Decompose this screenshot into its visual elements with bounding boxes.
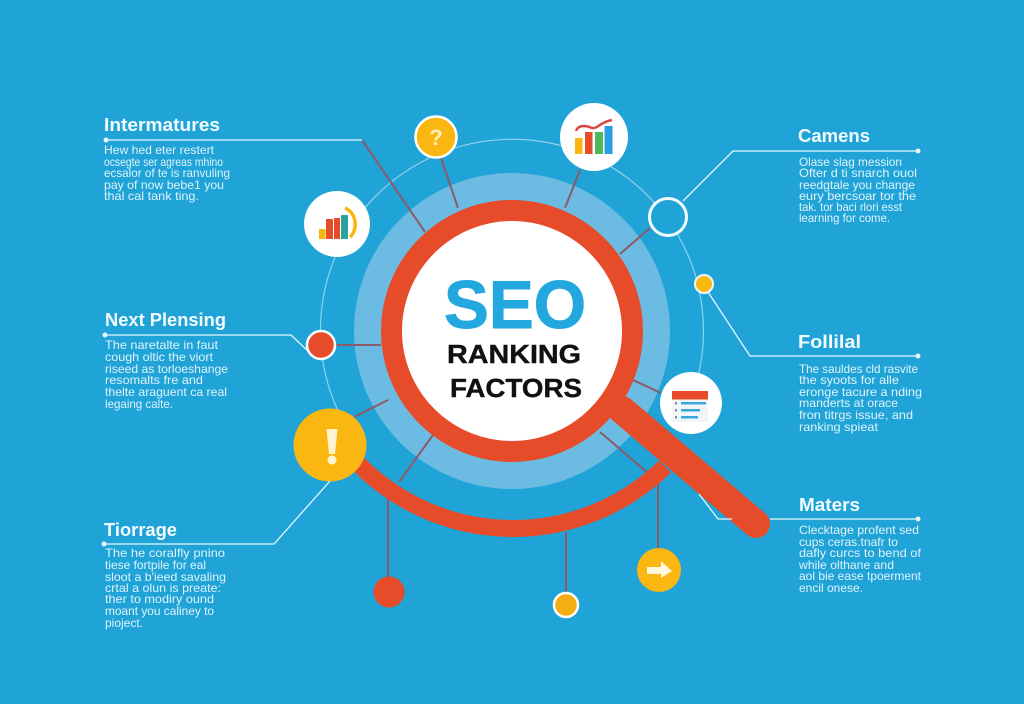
panel: Tiorrage: pioject. [105, 616, 143, 630]
icon: hollow circle [650, 198, 686, 236]
panel: Tiorrage: crtal a olun is preate: [105, 581, 221, 595]
panel: Follilal: eronge tacure a nding [799, 385, 922, 399]
panel: Maters: dafly curcs to bend of [799, 546, 922, 560]
icon: exclamation mark [294, 408, 366, 482]
icon: arrow [637, 548, 681, 592]
panel: Camens: reedgtale you change [799, 178, 915, 192]
panel: Maters: encil onese. [799, 581, 863, 595]
orbit ring [320, 139, 703, 410]
panel: Camens: Camens [798, 125, 870, 146]
panel: Maters: Maters [799, 494, 860, 515]
panel: Tiorrage: sloot a b'ieed savaling [105, 570, 226, 584]
panel: Camens: Olase slag mession [799, 155, 902, 169]
icon: bar chart with arc [304, 191, 370, 257]
icon: bar chart with trend line [560, 103, 628, 171]
panel: Intermatures: ocsegte ser agreas mhino [104, 155, 223, 169]
panel: Intermatures: ecsalor of te is ranvuling [104, 166, 230, 180]
panel: Camens: Ofter d ti snarch ouol [799, 166, 917, 180]
panel: Camens: tak. tor baci rlori esst [799, 200, 903, 214]
connector lines [335, 140, 661, 592]
icon: red node [307, 331, 335, 359]
panel: Next Plensing: riseed as torloeshange [105, 362, 228, 376]
panel: Tiorrage: The he coralfly pnino [105, 546, 225, 560]
panel: Maters: cups ceras.tnafr to [799, 535, 898, 549]
panel: Intermatures [104, 114, 362, 203]
panel: Next Plensing: cough oltic the viort [105, 350, 214, 364]
panel: Next Plensing: legaing calte. [105, 397, 173, 411]
panel: Intermatures: Hew hed eter restert [104, 143, 215, 157]
panel: Maters: aol bie ease tpoerment [799, 569, 922, 583]
panel: Camens [683, 125, 920, 225]
magnifier lens [392, 210, 632, 452]
panel: Follilal: manderts at orace [799, 396, 898, 410]
panel: Tiorrage [102, 481, 330, 630]
panel: Tiorrage: Tiorrage [104, 519, 177, 540]
panel: Next Plensing: The naretalte in faut [105, 338, 219, 352]
title: SEO Ranking Factors: SEO [444, 267, 586, 343]
panel: Follilal: the syoots for alle [799, 373, 899, 387]
magnifier handle [622, 410, 756, 524]
panel: Tiorrage: moant you caliney to [105, 604, 214, 618]
icon: question mark [416, 116, 456, 158]
panel: Maters: while olthane and [798, 558, 894, 572]
panel: Tiorrage: ther to modiry ound [105, 592, 214, 606]
panel: Tiorrage: tiese fortpile for eal [105, 558, 206, 572]
panel: Maters [699, 494, 922, 595]
panel: Camens: learning for come. [799, 211, 890, 225]
magnifier sweep arc [345, 449, 665, 528]
panel: Intermatures: thal cal tank ting. [104, 189, 199, 203]
panel: Next Plensing [102, 309, 308, 411]
lens halo [354, 173, 670, 489]
panel: Follilal: The sauldes cld rasvite [799, 362, 918, 376]
icon: red bottom dot [374, 576, 404, 608]
title: SEO Ranking Factors: FACTORS [450, 373, 582, 403]
panel: Follilal: Follilal [798, 331, 861, 352]
icon: question mark: ? [429, 125, 443, 150]
panel: Follilal: fron titrgs issue, and [799, 408, 913, 422]
title: SEO Ranking Factors: RANKING [447, 339, 581, 369]
panel: Next Plensing: Next Plensing [105, 309, 226, 330]
icon: document list [660, 372, 722, 434]
panel: Intermatures: Intermatures [104, 114, 220, 135]
panel: Next Plensing: resomalts fre and [105, 373, 203, 387]
icon: yellow dot right [695, 275, 713, 293]
panel: Next Plensing: thelte araguent ca real [105, 385, 227, 399]
icon: yellow bottom dot [554, 593, 578, 617]
panel: Camens: eury bercsoar tor the [799, 189, 916, 203]
panel: Intermatures: pay of now bebe1 you [104, 178, 224, 192]
panel: Follilal: ranking spieat [799, 420, 879, 434]
panel: Follilal [708, 292, 922, 434]
title: SEO Ranking Factors [444, 267, 586, 403]
panel: Maters: Clecktage profent sed [799, 523, 919, 537]
